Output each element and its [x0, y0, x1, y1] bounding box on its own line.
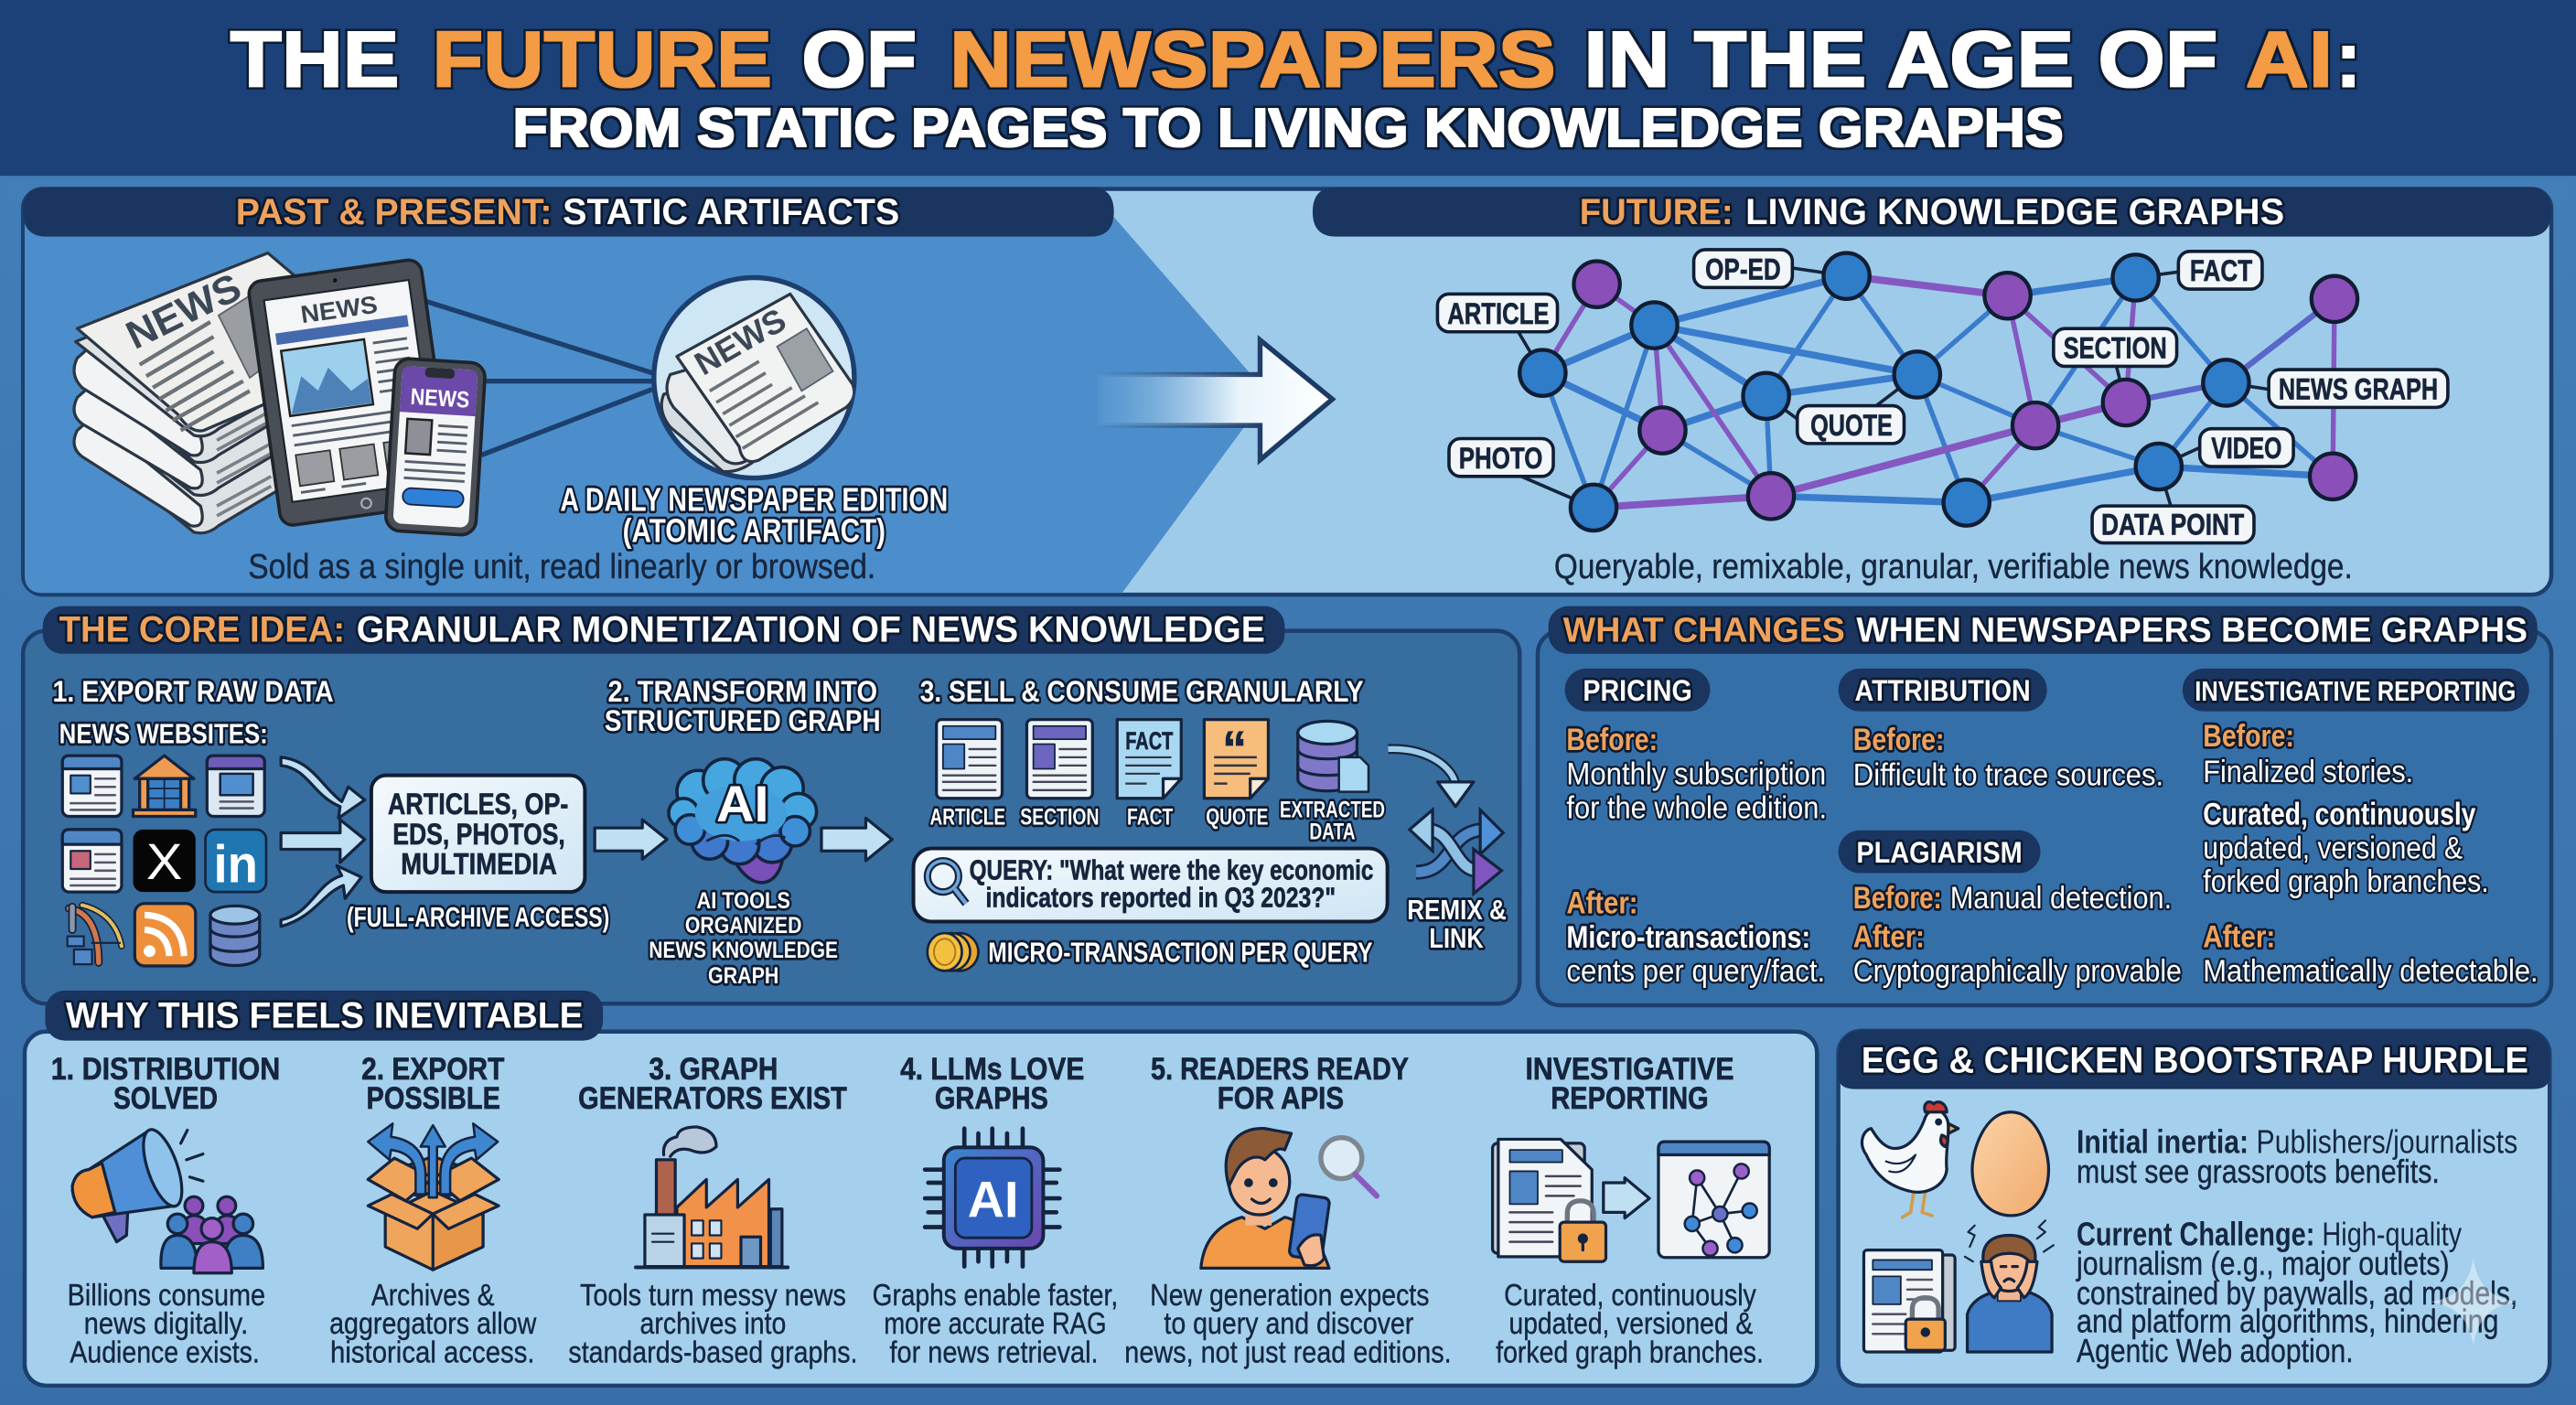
labels: granular units: SECTION	[1020, 805, 1099, 831]
graph labels: OP-ED	[1705, 252, 1781, 285]
icon: AI brain: AI	[716, 776, 769, 832]
icon: website 3	[62, 830, 122, 892]
column: attribution and plagiarism: Cryptographically provable	[1853, 954, 2182, 989]
graph labels: SECTION	[2064, 331, 2167, 364]
text: inertia detail: must see grassroots benefits.	[2077, 1153, 2440, 1190]
labels: granular units: QUOTE	[1206, 805, 1268, 831]
column 4: LLMs: more accurate RAG	[884, 1307, 1107, 1341]
label: remix and link: REMIX &	[1407, 895, 1507, 926]
heading: what changes: WHEN NEWSPAPERS BECOME GRAPHS	[1856, 610, 2528, 649]
graph labels: PHOTO	[1459, 442, 1542, 475]
column 3: graph generators: 3. GRAPH	[649, 1052, 778, 1087]
column 1: distribution: SOLVED	[113, 1081, 218, 1116]
label: AI tools: ORGANIZED	[685, 913, 801, 938]
chart: knowledge graph	[1437, 250, 2448, 543]
column 6: investigative reporting	[1493, 1052, 1769, 1370]
step 3 heading: 3. SELL & CONSUME GRANULARLY	[920, 675, 1364, 708]
icon: newspaper stack	[74, 253, 322, 533]
column 3: graph generators: standards-based graphs.	[568, 1336, 857, 1370]
column 4: LLMs: GRAPHS	[935, 1081, 1048, 1116]
icon: smartphone	[385, 358, 486, 536]
icon: fact	[1117, 720, 1181, 799]
icon: extracted data	[1298, 721, 1368, 792]
column: pricing: for the whole edition.	[1566, 790, 1827, 825]
text: current challenge: Agentic Web adoption.	[2077, 1332, 2354, 1369]
label: daily edition: (ATOMIC ARTIFACT)	[623, 512, 886, 550]
label: AI tools: GRAPH	[708, 963, 778, 989]
icon: quote	[1204, 720, 1268, 799]
column 3: graph generators	[568, 1052, 857, 1370]
column: investigative reporting: Curated, continuously	[2203, 798, 2475, 832]
column 3: graph generators: GENERATORS EXIST	[578, 1081, 847, 1116]
query box	[914, 849, 1388, 921]
column 5: readers: to query and discover	[1164, 1307, 1413, 1341]
column 1: distribution	[51, 1052, 280, 1370]
column 6: investigative reporting: updated, versioned &	[1509, 1307, 1753, 1341]
arrow: curve to remix	[1389, 749, 1474, 807]
icon: magnifier	[928, 861, 966, 904]
panel: what changes	[1538, 606, 2551, 1005]
title: NEWSPAPERS	[950, 16, 1556, 103]
graph nodes	[1519, 253, 2357, 531]
column 4: LLMs: Graphs enable faster,	[873, 1279, 1118, 1313]
column 5: readers: FOR APIS	[1218, 1081, 1344, 1116]
title: THE	[230, 16, 399, 103]
label: remix and link: LINK	[1429, 923, 1484, 954]
arrows into raw data box	[281, 757, 365, 927]
column: investigative reporting: Finalized stories.	[2203, 755, 2413, 789]
icon: AI chip	[925, 1129, 1059, 1267]
column: attribution and plagiarism: Before:	[1853, 881, 1942, 916]
column 2: export: 2. EXPORT	[361, 1052, 505, 1087]
icon: tablet: NEWS	[299, 291, 380, 328]
icon: tablet	[247, 259, 454, 527]
heading: egg and chicken	[1839, 1030, 2549, 1089]
title: FUTURE	[432, 16, 772, 103]
column: attribution and plagiarism	[1839, 669, 2182, 989]
box: raw content	[371, 776, 585, 892]
column 5: readers: news, not just read editions.	[1124, 1336, 1452, 1370]
title: :	[2336, 16, 2361, 103]
icon: smartphone: NEWS	[410, 384, 470, 413]
column 4: LLMs: for news retrieval.	[890, 1336, 1099, 1370]
heading: what changes	[1549, 606, 2538, 654]
column: attribution and plagiarism: After:	[1853, 919, 1925, 954]
icon: single newspaper in circle: NEWS	[688, 301, 792, 382]
box: raw content: EDS, PHOTOS,	[392, 818, 565, 851]
graph labels: NEWS GRAPH	[2279, 372, 2438, 405]
icon: quote: “	[1222, 722, 1247, 777]
panel: egg and chicken	[1839, 1030, 2549, 1386]
icon: section	[1026, 720, 1092, 799]
text: current challenge	[2076, 1215, 2517, 1369]
heading: future: FUTURE:	[1580, 192, 1733, 232]
step 2 heading: STRUCTURED GRAPH	[605, 704, 881, 737]
column 5: readers: New generation expects	[1150, 1279, 1429, 1313]
news websites label: NEWS WEBSITES:	[59, 719, 268, 750]
column: attribution and plagiarism: Before:	[1853, 723, 1944, 757]
title	[230, 16, 2361, 103]
column: investigative reporting: forked graph branches.	[2203, 864, 2489, 899]
column: investigative reporting: Before:	[2203, 719, 2294, 754]
step 1 heading: 1. EXPORT RAW DATA	[53, 675, 334, 708]
column 1: distribution: Audience exists.	[70, 1336, 260, 1370]
column: pricing: PRICING	[1583, 674, 1692, 707]
label: archive access: (FULL-ARCHIVE ACCESS)	[347, 902, 609, 933]
graph labels: FACT	[2190, 254, 2252, 287]
icon: database	[210, 906, 260, 966]
graph labels: VIDEO	[2211, 432, 2281, 465]
heading: future	[1313, 188, 2551, 237]
query box: indicators reported in Q3 2023?"	[986, 882, 1336, 913]
column 6: investigative reporting: Curated, continuously	[1504, 1279, 1756, 1313]
label: AI tools: NEWS KNOWLEDGE	[649, 938, 838, 963]
column 1: distribution: news digitally.	[84, 1307, 248, 1341]
heading: core idea: THE CORE IDEA:	[59, 609, 345, 649]
column: pricing: cents per query/fact.	[1566, 954, 1825, 989]
column: attribution and plagiarism: ATTRIBUTION	[1855, 674, 2031, 707]
labels: granular units: FACT	[1127, 805, 1174, 831]
label: daily edition: A DAILY NEWSPAPER EDITION	[560, 481, 948, 519]
text: initial inertia: Initial inertia: Publishers/journalists	[2077, 1123, 2517, 1161]
subtitle: FROM STATIC PAGES TO LIVING KNOWLEDGE GRAPHS	[512, 97, 2064, 158]
icon: factory	[636, 1127, 788, 1268]
caption: past: Sold as a single unit, read linearly or browsed.	[248, 547, 875, 585]
icon: chicken	[1862, 1102, 1959, 1217]
text: current challenge: and platform algorithms, hindering	[2077, 1302, 2499, 1339]
query box: QUERY: "What were the key economic	[970, 855, 1373, 886]
graph labels	[1437, 250, 2448, 543]
column 4: LLMs: 4. LLMs LOVE	[900, 1052, 1084, 1087]
heading: past and present: STATIC ARTIFACTS	[563, 192, 899, 232]
column: attribution and plagiarism: PLAGIARISM	[1856, 836, 2023, 869]
title: OF	[801, 16, 917, 103]
label: AI tools: AI TOOLS	[696, 888, 790, 914]
column: attribution and plagiarism: Manual detection.	[1950, 881, 2172, 916]
connector lines	[424, 301, 652, 455]
heading: why inevitable: WHY THIS FEELS INEVITABLE	[66, 995, 584, 1035]
icon: locked newspaper	[1863, 1250, 1955, 1352]
label: remix and link	[1407, 895, 1507, 954]
step 2 heading	[605, 675, 881, 737]
icon: LinkedIn	[206, 830, 266, 894]
icon: coins	[928, 933, 978, 971]
column: pricing: Before:	[1566, 723, 1658, 757]
column 2: export: Archives &	[371, 1279, 495, 1313]
panel: core idea	[23, 606, 1519, 1003]
icon: megaphone and audience	[72, 1125, 263, 1273]
panel: past and present background	[25, 190, 1268, 593]
icon: newspaper stack: NEWS	[120, 265, 248, 359]
heading: future: LIVING KNOWLEDGE GRAPHS	[1745, 192, 2284, 232]
labels: granular units: DATA	[1309, 820, 1356, 845]
icon: single newspaper in circle	[654, 278, 854, 478]
icon: AI brain	[669, 759, 817, 883]
column 2: export: historical access.	[330, 1336, 535, 1370]
caption: future: Queryable, remixable, granular, verifiable news knowledge.	[1554, 547, 2353, 585]
column: investigative reporting: After:	[2203, 919, 2275, 954]
column 3: graph generators: archives into	[640, 1307, 786, 1341]
panel: past and future	[23, 188, 2551, 595]
column 1: distribution: 1. DISTRIBUTION	[51, 1052, 280, 1087]
icon: remix shuffle	[1410, 810, 1503, 894]
icon: mixed feeds	[68, 906, 122, 964]
column 4: LLMs	[873, 1052, 1118, 1370]
column 2: export: POSSIBLE	[367, 1081, 500, 1116]
arrow: to sell	[821, 818, 892, 861]
heading: egg and chicken: EGG & CHICKEN BOOTSTRAP HURDLE	[1862, 1041, 2528, 1081]
title: AI	[2246, 16, 2333, 103]
icon: website 1	[62, 756, 122, 817]
graph labels: ARTICLE	[1447, 297, 1550, 330]
step 2 heading: 2. TRANSFORM INTO	[608, 675, 877, 708]
column 6: investigative reporting: forked graph branches.	[1496, 1336, 1764, 1370]
text: current challenge: Current Challenge: High-quality	[2077, 1215, 2462, 1252]
heading: core idea	[43, 606, 1284, 654]
heading: past and present: PAST & PRESENT:	[236, 192, 552, 232]
column 5: readers: 5. READERS READY	[1151, 1052, 1409, 1087]
column 2: export: aggregators allow	[329, 1307, 537, 1341]
column: pricing	[1565, 669, 1827, 989]
icon: RSS	[134, 904, 196, 966]
icon: AI chip: AI	[968, 1172, 1018, 1228]
heading: core idea: GRANULAR MONETIZATION OF NEWS KNOWLEDGE	[357, 609, 1265, 649]
icon: website 2	[207, 756, 264, 817]
icon: egg	[1972, 1112, 2048, 1216]
icon: reader with phone	[1201, 1129, 1377, 1268]
column 2: export	[329, 1052, 537, 1370]
column: investigative reporting: updated, versioned &	[2203, 831, 2463, 865]
column: investigative reporting	[2183, 669, 2538, 989]
column 3: graph generators: Tools turn messy news	[580, 1279, 846, 1313]
icon: X	[134, 830, 196, 892]
column 6: investigative reporting: REPORTING	[1551, 1081, 1709, 1116]
icon: article	[937, 720, 1003, 799]
graph labels: DATA POINT	[2101, 509, 2244, 542]
column 5: readers	[1124, 1052, 1452, 1370]
labels: granular units	[930, 797, 1385, 845]
column 1: distribution: Billions consume	[68, 1279, 265, 1313]
column: attribution and plagiarism: Difficult to trace sources.	[1853, 757, 2163, 792]
label: AI tools	[649, 888, 838, 989]
text: current challenge: journalism (e.g., major outlets)	[2076, 1245, 2450, 1282]
watermark sparkle	[2431, 1259, 2516, 1346]
icon: LinkedIn: in	[214, 835, 258, 894]
column: pricing: Micro-transactions:	[1566, 920, 1810, 955]
heading: past and present	[23, 188, 1114, 237]
icon: institution	[134, 756, 196, 817]
labels: granular units: EXTRACTED	[1280, 797, 1385, 822]
icon grid: news sources	[62, 756, 266, 966]
icon: open box with arrows	[368, 1123, 499, 1270]
labels: granular units: ARTICLE	[930, 805, 1005, 831]
column 6: investigative reporting: INVESTIGATIVE	[1526, 1052, 1734, 1087]
column: investigative reporting: Mathematically detectable.	[2203, 954, 2538, 989]
arrow: past to future	[1098, 340, 1332, 460]
arrow: to AI	[595, 820, 667, 859]
title banner	[0, 0, 2576, 176]
icon: stressed person	[1965, 1220, 2054, 1352]
panel: why this feels inevitable	[25, 991, 1817, 1386]
column: pricing: After:	[1566, 885, 1638, 920]
graph labels: QUOTE	[1810, 409, 1893, 442]
box: raw content: MULTIMEDIA	[401, 847, 557, 880]
icon: locked document to graph window	[1493, 1139, 1769, 1261]
label: daily edition	[560, 481, 948, 550]
label: micro-transaction: MICRO-TRANSACTION PER QUERY	[988, 937, 1372, 968]
heading: what changes: WHAT CHANGES	[1563, 610, 1845, 649]
box: raw content: ARTICLES, OP-	[388, 788, 568, 820]
icon: fact: FACT	[1125, 727, 1174, 755]
column: investigative reporting: INVESTIGATIVE REPORTING	[2195, 676, 2516, 707]
column: pricing: Monthly subscription	[1566, 757, 1826, 792]
title: IN THE AGE OF	[1583, 16, 2217, 103]
icon: X: X	[146, 833, 182, 890]
